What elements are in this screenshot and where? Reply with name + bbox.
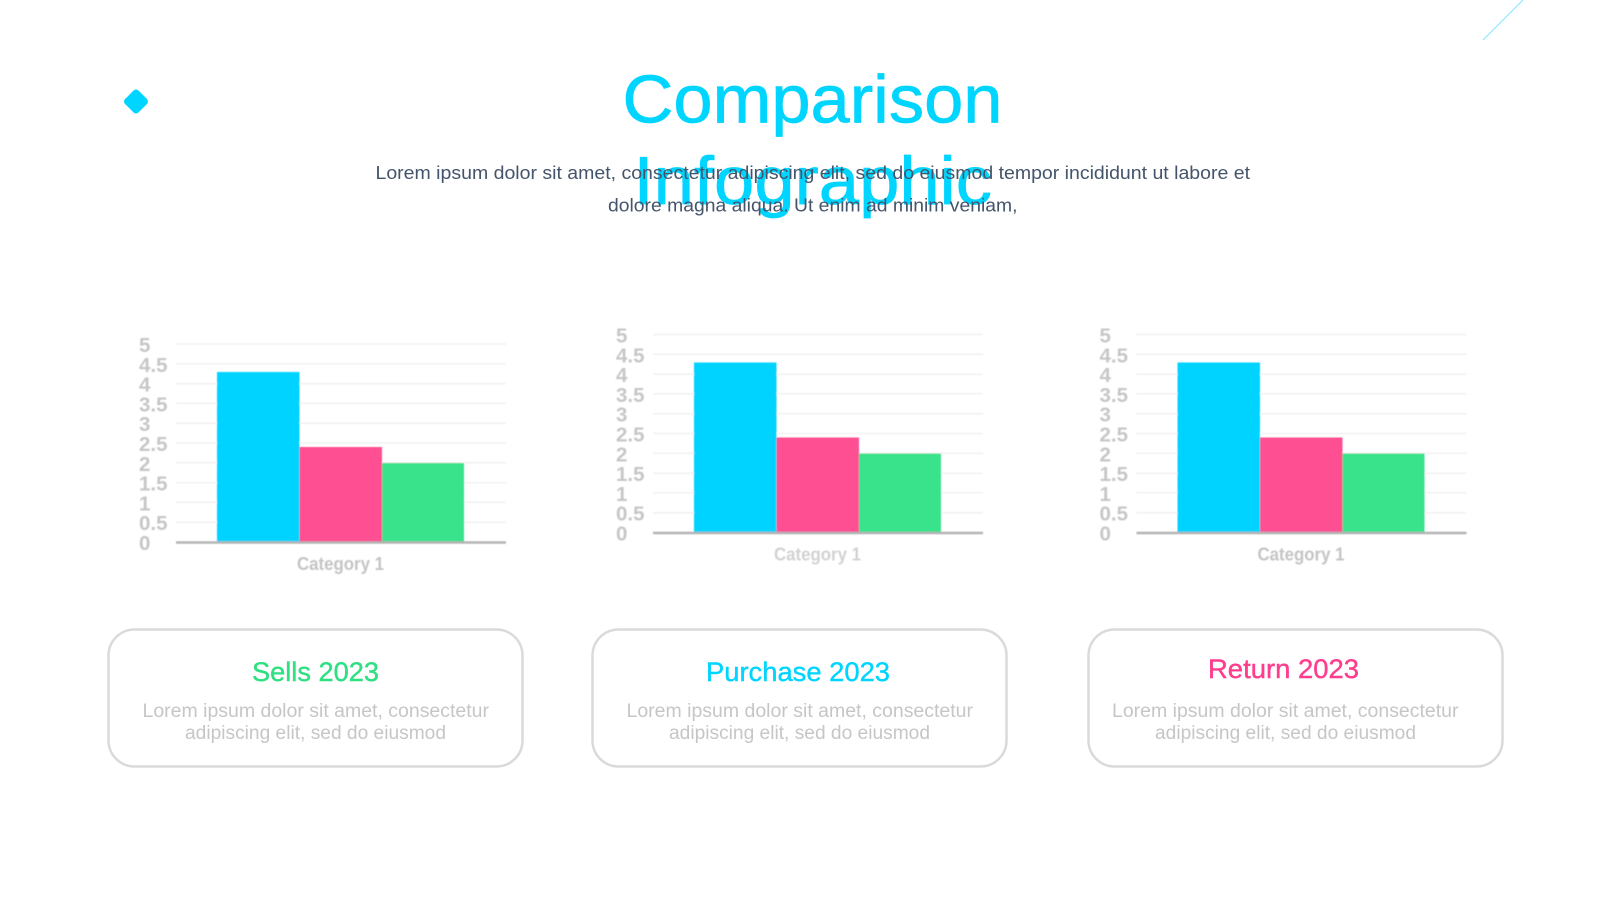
bar chart: right: Category 1 (1258, 544, 1344, 564)
subtitle text: Lorem ipsum dolor sit amet, consectetur adipiscing elit, sed do eiusmod tempor incididunt ut labore et (376, 163, 1250, 183)
bar chart: left: 2 (139, 453, 150, 476)
bar chart: middle: 4.5 (616, 344, 644, 367)
bar chart: right: 2.5 (1100, 424, 1128, 446)
card text: Sells (142, 701, 490, 744)
card text: Return: Lorem ipsum dolor sit amet, consectetur (1112, 701, 1459, 722)
title (622, 62, 1002, 219)
bar chart: middle: 0.5 (616, 503, 644, 526)
panel: Purchase 2023 (592, 630, 1006, 766)
bar chart: middle: 2 (616, 443, 627, 466)
bar chart: left: 2.5 (139, 433, 168, 456)
subtitle text: dolore magna aliqua. Ut enim ad minim veniam, (608, 196, 1018, 216)
title: Comparison (622, 62, 1002, 138)
bar chart: left (139, 334, 506, 574)
bar chart: middle: 1.5 (616, 463, 644, 486)
bar chart: middle (616, 324, 983, 564)
bar chart: middle: 4 (616, 364, 628, 387)
card heading: Sells 2023: Sells 2023 (252, 657, 379, 687)
card text: Sells: adipiscing elit, sed do eiusmod (185, 723, 446, 744)
bar chart: left: 0 (139, 532, 150, 555)
bar chart: left: 5 (139, 334, 150, 357)
bar chart: left: 4 (139, 374, 151, 397)
bar chart: left: 3 (139, 413, 150, 436)
bar chart: right: 2 (1100, 443, 1111, 466)
bar chart: left: 0.5 (139, 512, 168, 535)
bar chart: left: 1.5 (139, 473, 168, 496)
bar chart: middle: 1 (616, 483, 627, 506)
card heading: Return 2023: Return 2023 (1208, 654, 1359, 684)
card text: Purchase (626, 701, 974, 744)
subtitle text (376, 163, 1250, 216)
title: Infographic (634, 143, 992, 219)
bar chart: right: 1.5 (1100, 463, 1128, 486)
bar chart: right: 3.5 (1100, 384, 1128, 407)
panel: Return 2023 (1088, 630, 1502, 766)
bar chart: middle: 5 (616, 324, 627, 348)
panel: Sells 2023 (108, 630, 522, 766)
bar chart: middle: 3.5 (616, 384, 644, 407)
bar chart: right: 1 (1100, 483, 1111, 506)
bar chart: right: 4.5 (1100, 344, 1128, 367)
bar chart: left: Category 1 (297, 554, 384, 574)
bar chart: middle: 3 (616, 404, 627, 427)
bar chart: right: 0 (1100, 522, 1111, 546)
card text: Sells: Lorem ipsum dolor sit amet, consectetur (142, 701, 490, 722)
card heading: Purchase 2023: Purchase 2023 (706, 657, 890, 687)
bar chart: left: 4.5 (139, 354, 168, 377)
card text: Purchase: adipiscing elit, sed do eiusmod (669, 723, 930, 744)
bar chart: middle: 0 (616, 522, 627, 546)
bar chart: right (1100, 324, 1466, 564)
bar chart: middle: 2.5 (616, 424, 644, 446)
bar chart: middle: Category 1 (774, 544, 861, 564)
bar chart: right: 0.5 (1100, 503, 1128, 526)
bar chart: right: 3 (1100, 404, 1111, 427)
bar chart: right: 5 (1100, 324, 1111, 348)
icon: diamond (123, 88, 149, 115)
decorative corner line (1483, 0, 1523, 40)
bar chart: right: 4 (1100, 364, 1112, 387)
bar chart: left: 1 (139, 492, 150, 515)
bar chart: left: 3.5 (139, 393, 168, 416)
card text: Return (1112, 701, 1459, 744)
card text: Purchase: Lorem ipsum dolor sit amet, consectetur (626, 701, 974, 722)
card text: Return: adipiscing elit, sed do eiusmod (1155, 723, 1416, 744)
